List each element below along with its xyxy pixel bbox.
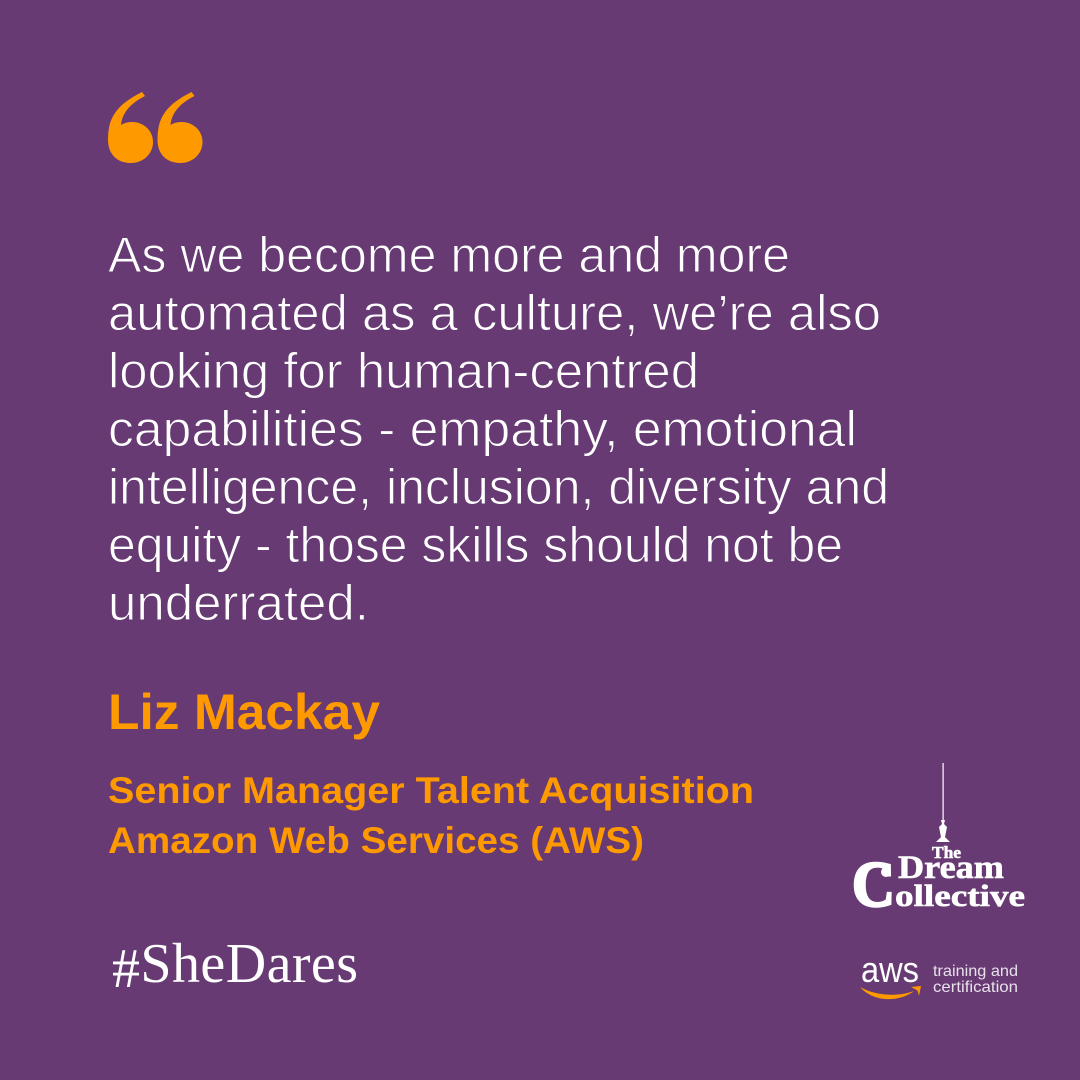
aws wordmark: aws bbox=[861, 949, 919, 990]
hashtag: SheDares bbox=[140, 933, 358, 995]
quote text: capabilities - empathy, emotional bbox=[108, 401, 857, 457]
quote text: As we become more and more bbox=[108, 227, 790, 283]
logo wordmark: Dream bbox=[898, 850, 1004, 886]
training and certification text: training and bbox=[933, 963, 1018, 980]
quote text: intelligence, inclusion, diversity and bbox=[108, 459, 889, 515]
training and certification text bbox=[933, 963, 1018, 996]
logo wordmark: The bbox=[932, 843, 961, 862]
quote text: looking for human-centred bbox=[108, 343, 699, 399]
logo: The Dream Collective bbox=[852, 763, 1025, 921]
icon: opening quotation mark bbox=[108, 92, 202, 163]
training and certification text: certification bbox=[933, 979, 1018, 996]
quote text: equity - those skills should not be bbox=[108, 517, 843, 573]
logo wordmark: C bbox=[852, 849, 895, 921]
quote text bbox=[108, 227, 889, 631]
hashtag: # bbox=[112, 938, 140, 1000]
speaker role and company bbox=[108, 770, 754, 861]
logo wordmark bbox=[852, 843, 1025, 921]
logo wordmark: ollective bbox=[895, 878, 1025, 913]
quote text: automated as a culture, we’re also bbox=[108, 285, 881, 341]
speaker role and company: Senior Manager Talent Acquisition bbox=[108, 770, 754, 811]
logo: AWS training and certification bbox=[860, 949, 1018, 999]
quote text: underrated. bbox=[108, 575, 369, 631]
speaker role and company: Amazon Web Services (AWS) bbox=[108, 820, 644, 861]
icon: hanging ornament bbox=[936, 763, 950, 842]
speaker name: Liz Mackay bbox=[108, 684, 380, 740]
icon: C ball terminal bbox=[881, 867, 891, 877]
icon: amazon smile arrow bbox=[860, 986, 921, 999]
